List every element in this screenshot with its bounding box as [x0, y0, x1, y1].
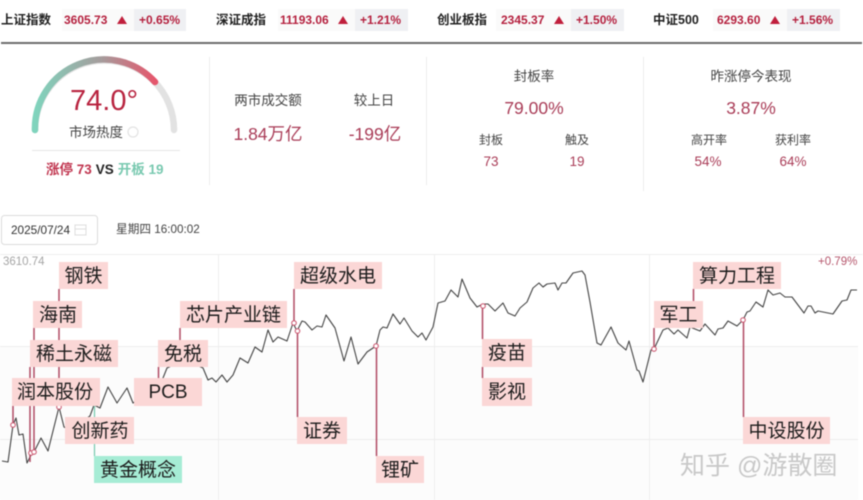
label: 超级水电: 超级水电 [300, 265, 376, 287]
panel: market heat gauge [32, 59, 180, 177]
ticker: 上证指数: 上证指数 [1, 12, 52, 27]
label: 中设股份 [743, 417, 830, 444]
label: 润本股份: 润本股份 [17, 381, 93, 403]
ticker: 深证成指: +1.21% [360, 13, 401, 27]
label: 芯片产业链: 芯片产业链 [186, 304, 281, 326]
label: 稀土永磁: 稀土永磁 [36, 343, 112, 365]
label: 钢铁: 钢铁 [64, 265, 103, 287]
label: 算力工程 [693, 262, 781, 289]
panel: yesterday limit-up performance: 昨涨停今表现 [710, 68, 792, 84]
label: 影视 [482, 378, 532, 406]
label: 疫苗 [482, 339, 532, 367]
gauge reading: 74.0° [70, 85, 138, 117]
label: 超级水电 [294, 262, 382, 289]
panel: seal rate: 73 [483, 154, 499, 169]
ticker: 上证指数 [1, 9, 186, 31]
label: 锂矿: 锂矿 [381, 459, 419, 481]
label: 疫苗: 疫苗 [488, 342, 526, 364]
label: 黄金概念 [94, 456, 182, 483]
label: 免税: 免税 [164, 343, 202, 365]
event connector lines [13, 289, 744, 462]
ticker: 深证成指 [216, 9, 408, 31]
ticker: 中证500: 中证500 [653, 12, 699, 27]
panel: turnover: -199亿 [349, 124, 401, 144]
label: 影视: 影视 [488, 381, 526, 403]
event markers [11, 304, 745, 455]
weekday and time: 星期四 16:00:02 [116, 223, 200, 236]
panel: seal rate: 79.00% [504, 98, 564, 118]
label: 芯片产业链 [180, 301, 287, 328]
index ticker bar [1, 9, 840, 31]
date picker [2, 216, 98, 244]
label: 稀土永磁 [30, 340, 118, 367]
label: PCB: PCB [148, 382, 188, 403]
label: 中设股份: 中设股份 [748, 420, 825, 442]
panel: seal rate: 封板 [479, 133, 503, 147]
label: 海南: 海南 [39, 304, 77, 326]
panel: yesterday limit-up performance: 3.87% [726, 98, 776, 118]
label: 证券 [297, 417, 347, 444]
label: 钢铁 [59, 262, 108, 289]
panel: yesterday limit-up performance: 54% [694, 154, 722, 169]
label: 海南 [33, 301, 82, 328]
ticker: 中证500: +1.56% [792, 13, 833, 27]
panel: turnover [233, 92, 401, 144]
ticker: 深证成指: 深证成指 [216, 12, 267, 27]
panel: yesterday limit-up performance [691, 68, 811, 169]
panel: yesterday limit-up performance: 64% [779, 154, 807, 169]
intraday chart [0, 254, 863, 500]
gauge value arc [35, 59, 155, 130]
ticker: 中证500: 6293.60 [717, 13, 761, 27]
label: 算力工程: 算力工程 [699, 265, 775, 287]
panel: seal rate [479, 68, 589, 169]
panel: turnover: 1.84万亿 [233, 124, 303, 144]
ticker: 中证500 [653, 9, 840, 31]
panel: seal rate: 触及 [565, 133, 589, 147]
ticker: 上证指数: +0.65% [139, 13, 180, 27]
label: 军工 [654, 301, 703, 328]
price line [2, 271, 857, 463]
label: 润本股份 [12, 378, 100, 406]
ticker: 深证成指: 11193.06 [280, 13, 329, 27]
limit up vs open board: 涨停 73 VS 开板 19 [46, 161, 164, 177]
axis change percent: +0.79% [818, 256, 857, 268]
panel: yesterday limit-up performance: 高开率 [691, 132, 727, 147]
panel: turnover: 两市成交额 [234, 92, 302, 108]
ticker: 上证指数: 3605.73 [64, 13, 108, 27]
panel: seal rate: 封板率 [514, 68, 554, 84]
label: 创新药: 创新药 [71, 420, 129, 442]
label: 黄金概念: 黄金概念 [100, 458, 176, 481]
panel: seal rate: 19 [569, 154, 585, 169]
ticker: 创业板指: 2345.37 [501, 13, 545, 27]
label: 创新药 [65, 417, 134, 444]
ticker: 创业板指: 创业板指 [437, 12, 488, 27]
axis high value: 3610.74 [3, 256, 45, 268]
ticker: 创业板指 [437, 9, 624, 31]
label: 锂矿 [376, 456, 424, 483]
date picker: 2025/07/24 [11, 223, 70, 237]
panel: yesterday limit-up performance: 获利率 [775, 132, 811, 147]
label: 证券: 证券 [303, 420, 341, 442]
gauge caption: 市场热度 [69, 124, 123, 140]
watermark: 知乎 @游散圈 [680, 452, 837, 480]
panel: turnover: 较上日 [354, 93, 394, 108]
label: 免税 [158, 340, 208, 367]
ticker: 创业板指: +1.50% [576, 13, 617, 27]
label: 军工: 军工 [659, 305, 698, 326]
label: PCB [134, 378, 202, 406]
